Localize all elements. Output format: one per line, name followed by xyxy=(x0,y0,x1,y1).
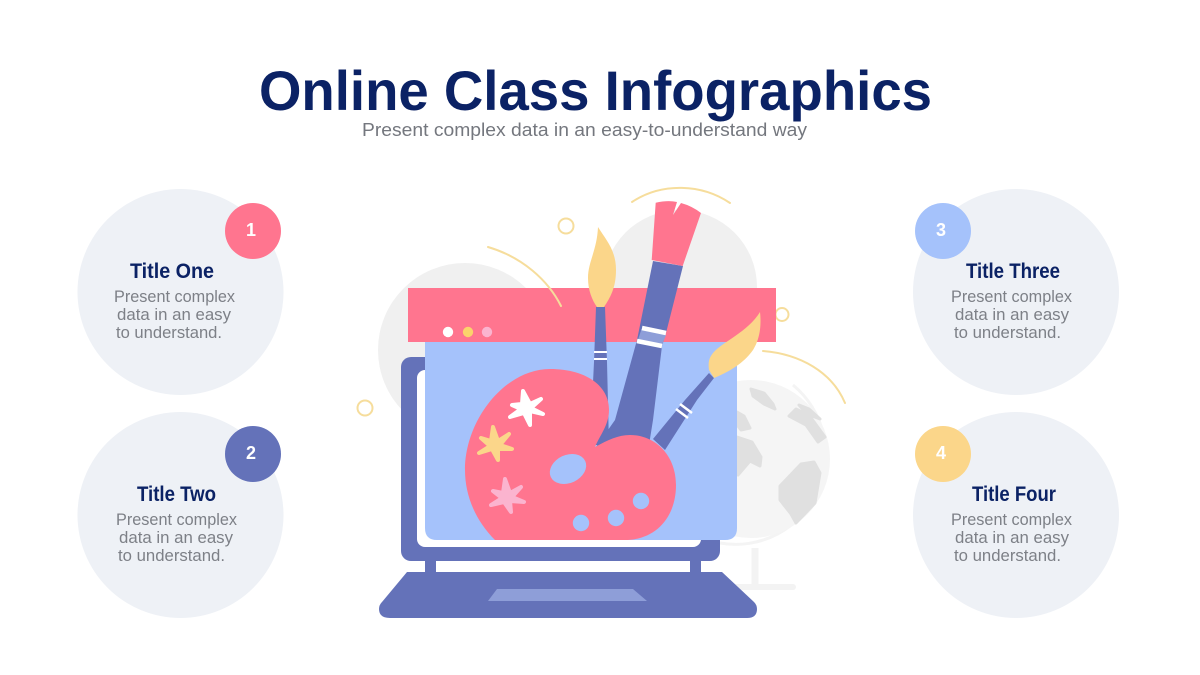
paint splat: pink xyxy=(491,479,524,512)
brush: centre xyxy=(596,201,701,447)
brush: right xyxy=(653,312,761,450)
paint splat: yellow xyxy=(479,427,512,460)
badge 1: 1 xyxy=(246,220,256,240)
decorative arc over bar xyxy=(488,247,561,306)
body text: title three xyxy=(951,288,1073,342)
panel: title two xyxy=(78,412,284,618)
palette xyxy=(465,369,676,540)
heading: title three: Title Three xyxy=(966,260,1060,283)
heading: title four: Title Four xyxy=(972,483,1056,506)
badge 3 xyxy=(915,203,971,259)
body text: title three: to understand. xyxy=(954,324,1061,342)
body text: title two: data in an easy xyxy=(119,529,234,547)
background circles xyxy=(378,210,757,437)
laptop xyxy=(379,357,757,618)
heading: title two: Title Two xyxy=(137,483,216,506)
badge 3: 3 xyxy=(936,220,946,240)
body text: title three: Present complex xyxy=(951,288,1073,306)
badge 1 xyxy=(225,203,281,259)
panel: title four xyxy=(913,412,1119,618)
decorative arcs xyxy=(632,188,845,403)
badge 2 xyxy=(225,426,281,482)
decorative rings xyxy=(358,218,788,416)
browser window xyxy=(408,288,776,540)
body text: title four: to understand. xyxy=(954,547,1061,565)
paint splat: white xyxy=(510,391,543,425)
body text: title one: to understand. xyxy=(116,324,222,342)
panel: title one xyxy=(78,189,284,395)
heading: title one: Title One xyxy=(130,260,214,283)
title: Online Class Infographics xyxy=(259,59,932,122)
palette thumb hole xyxy=(545,448,591,490)
body text: title one: Present complex xyxy=(114,288,236,306)
central illustration xyxy=(358,188,845,618)
body text: title two: Present complex xyxy=(116,511,238,529)
panel: title three xyxy=(913,189,1119,395)
body text: title two xyxy=(116,511,238,565)
body text: title one xyxy=(114,288,236,342)
body text: title four xyxy=(951,511,1073,565)
subtitle: Present complex data in an easy-to-understand way xyxy=(362,119,808,140)
globe xyxy=(672,380,830,590)
body text: title two: to understand. xyxy=(118,547,225,565)
body text: title three: data in an easy xyxy=(955,306,1070,324)
paint wells xyxy=(573,493,649,531)
body text: title four: Present complex xyxy=(951,511,1073,529)
badge 4 xyxy=(915,426,971,482)
brush: left xyxy=(588,227,616,445)
badge 2: 2 xyxy=(246,443,256,463)
body text: title four: data in an easy xyxy=(955,529,1070,547)
badge 4: 4 xyxy=(936,443,946,463)
body text: title one: data in an easy xyxy=(117,306,232,324)
